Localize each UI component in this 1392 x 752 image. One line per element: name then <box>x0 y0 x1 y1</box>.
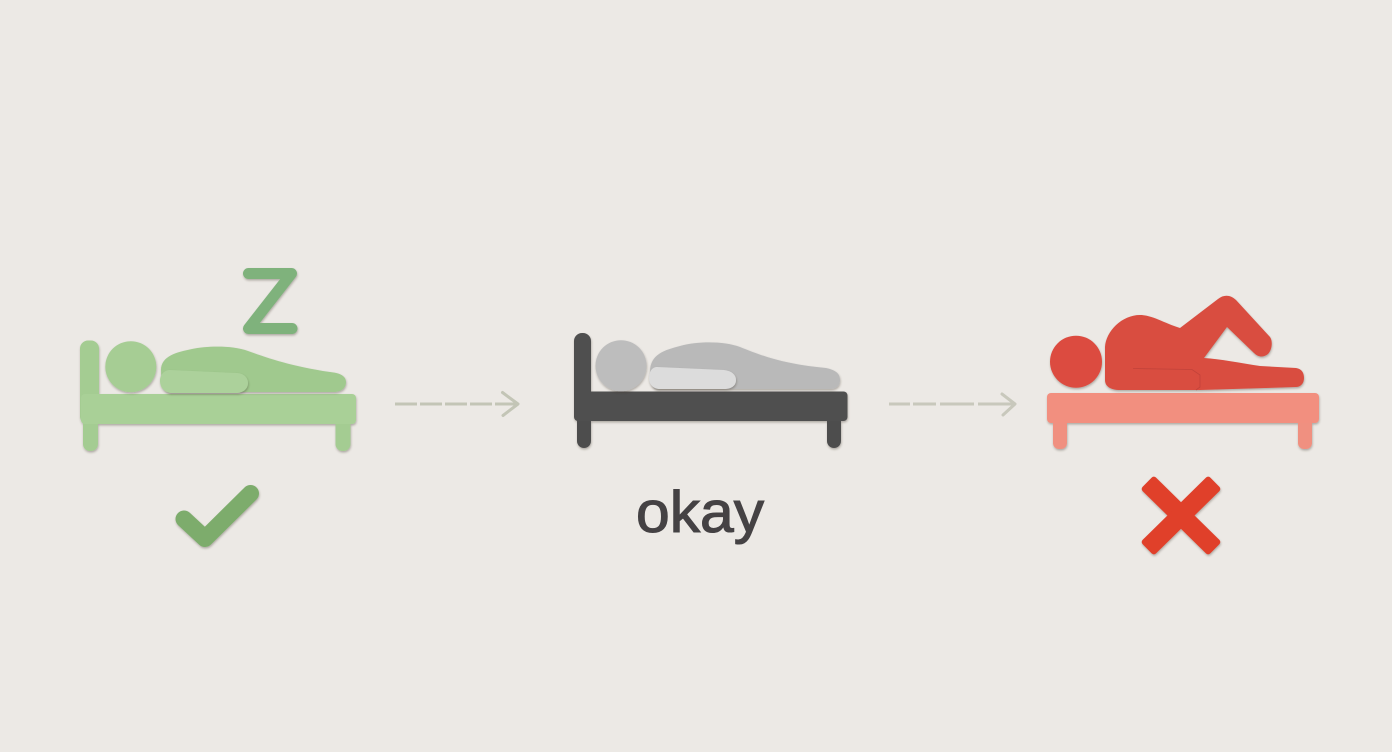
icon: grey sleeper head <box>596 340 646 391</box>
icon: salmon bed <box>1047 393 1319 449</box>
icon: green sleeper head <box>105 341 156 392</box>
label: okay: okay <box>636 480 764 545</box>
icon: green Z <box>248 274 292 328</box>
icon: green check mark <box>184 494 250 538</box>
panel: bad position (side sleeping) <box>1047 296 1319 556</box>
arrow: grey to red <box>889 394 1015 415</box>
icon: red sleeper body with raised knee <box>1105 296 1304 390</box>
icon: red cross <box>1140 475 1222 556</box>
icon: grey bed <box>574 333 848 448</box>
panel: good position (back sleeping) <box>80 274 356 538</box>
icon: grey sleeper arm <box>649 367 736 389</box>
icon: green sleeper arm <box>160 370 248 393</box>
icon: green bed <box>80 340 356 451</box>
arrow: green to grey <box>395 392 518 416</box>
icon: grey sleeper body <box>650 342 840 389</box>
panel: okay position <box>574 333 848 545</box>
icon: green sleeper body <box>161 347 346 392</box>
icon: red sleeper arm seam <box>1133 368 1200 390</box>
icon: red sleeper head <box>1050 336 1102 388</box>
